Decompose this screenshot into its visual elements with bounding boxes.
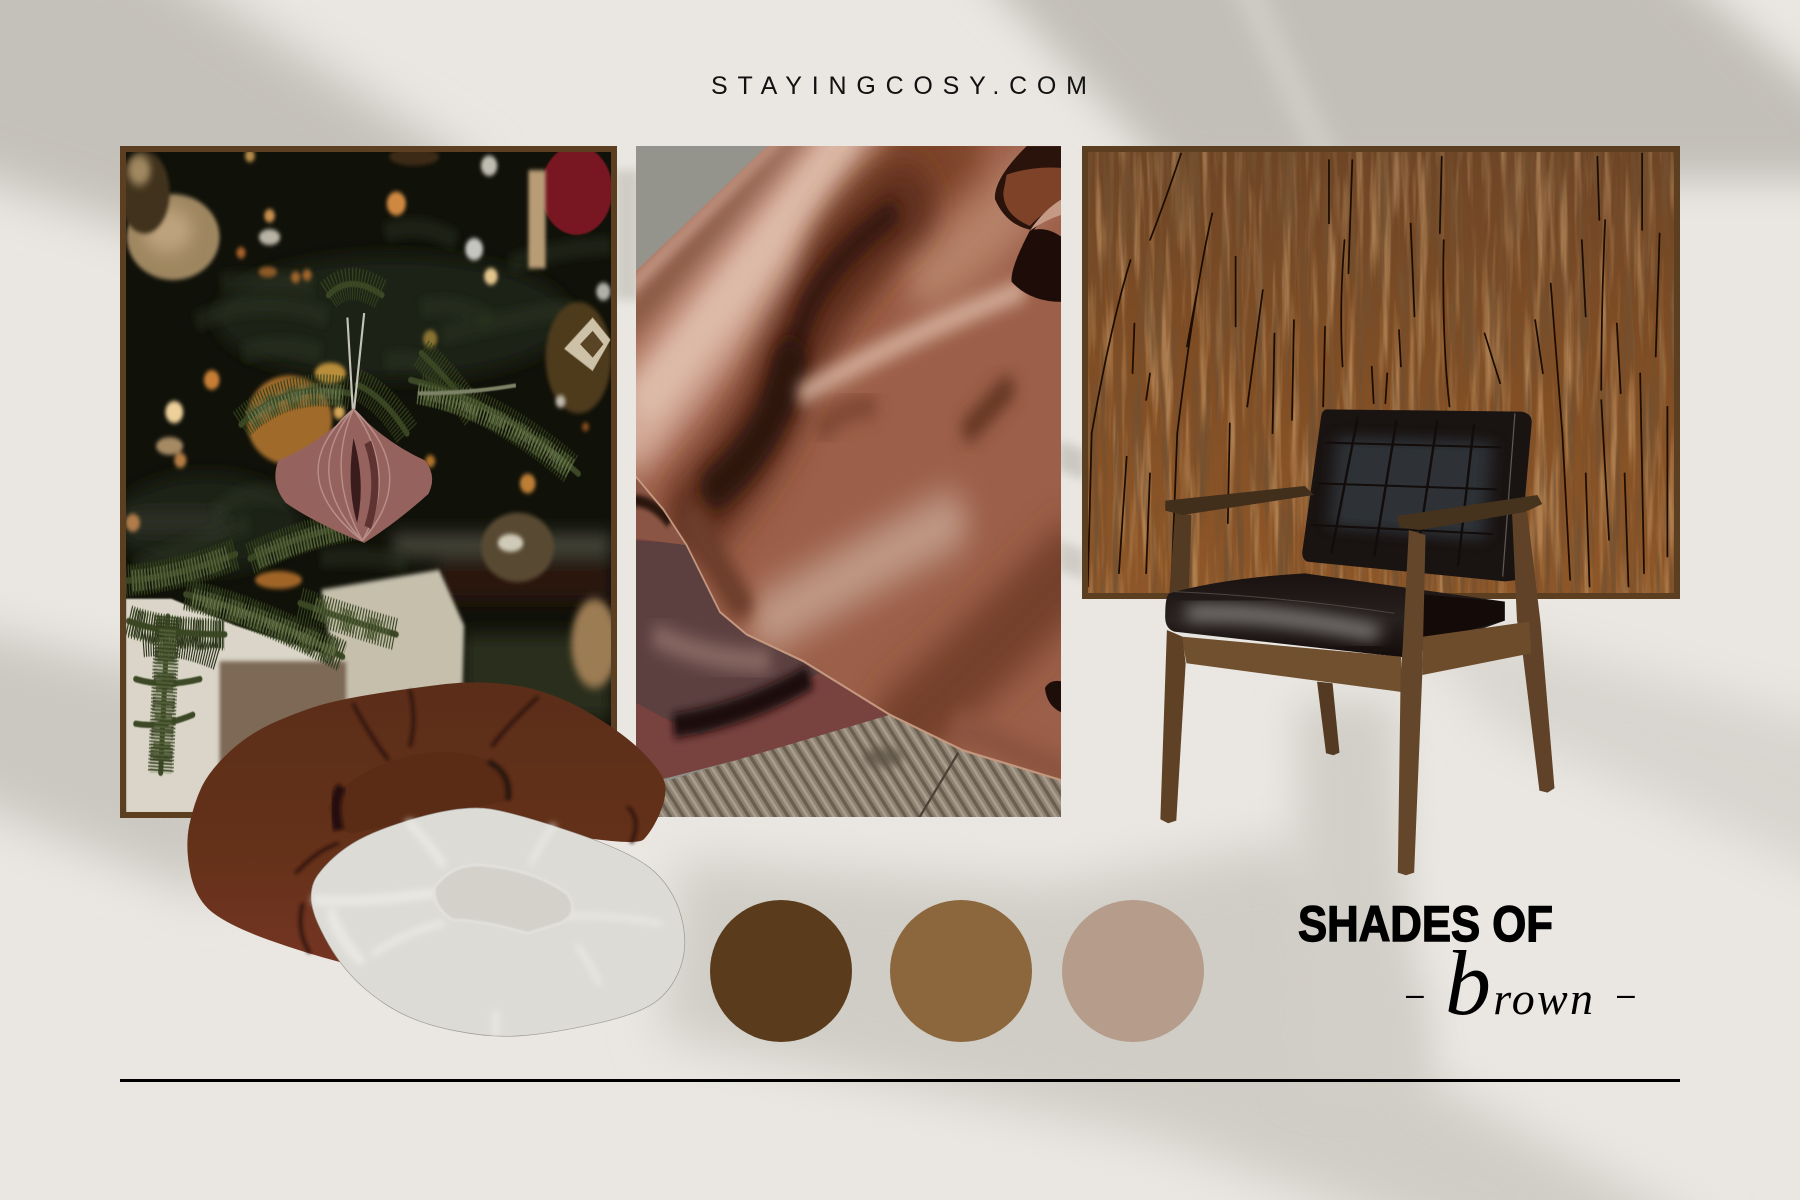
bokeh lights: [126, 148, 611, 589]
chair backrest: [1302, 409, 1532, 581]
icon: leather armchair: [1160, 409, 1554, 875]
heading script word: brown: [1445, 932, 1593, 1034]
tree background foliage: [114, 228, 611, 719]
heading script word: –: [1617, 976, 1635, 1012]
heading line one: SHADES OF: [1298, 896, 1553, 952]
cushion inner roll: [328, 752, 510, 833]
chair right back leg: [1512, 512, 1554, 793]
panel: christmas tree photo: [114, 146, 618, 818]
swatch: taupe: [1062, 900, 1204, 1042]
chair aprons: [1182, 622, 1531, 692]
fir branches: [126, 284, 578, 773]
swatch: mid brown: [890, 900, 1032, 1042]
colour swatches: [710, 900, 1204, 1042]
panel: wood grain photo: [1082, 146, 1680, 599]
notches in leather: [995, 146, 1062, 713]
chair legs front: [1160, 530, 1426, 875]
divider line: [120, 1079, 1680, 1082]
chair armrests: [1165, 486, 1542, 530]
cushion creases: [296, 690, 636, 953]
swatch: dark brown: [710, 900, 852, 1042]
heading script word: –: [1406, 976, 1424, 1012]
white cushion highlights: [317, 823, 660, 1033]
heading script word: [1406, 932, 1635, 1034]
chair seat cushion: [1165, 573, 1505, 657]
leather sheet with folds: [636, 146, 1061, 779]
wood cracks: [1088, 153, 1667, 587]
chair back post: [1169, 513, 1191, 593]
icon: white round cushion: [311, 808, 685, 1036]
wood floor: [650, 715, 1063, 822]
chair rear leg: [1317, 682, 1339, 755]
paper ornament: [275, 313, 432, 543]
title: website name: STAYINGCOSY.COM: [711, 72, 1087, 100]
panel: leather photo: [630, 130, 1070, 826]
icon: brown round cushion: [187, 682, 666, 963]
gifts: [126, 570, 464, 813]
grey backdrop: [636, 146, 770, 273]
lower dark sheet: [633, 474, 930, 786]
white cushion centre dimple: [434, 865, 573, 933]
ornaments: gold and red baubles: [120, 146, 618, 688]
leather edge highlight: [633, 474, 1063, 781]
heading: shades of brown: [1298, 896, 1635, 1034]
